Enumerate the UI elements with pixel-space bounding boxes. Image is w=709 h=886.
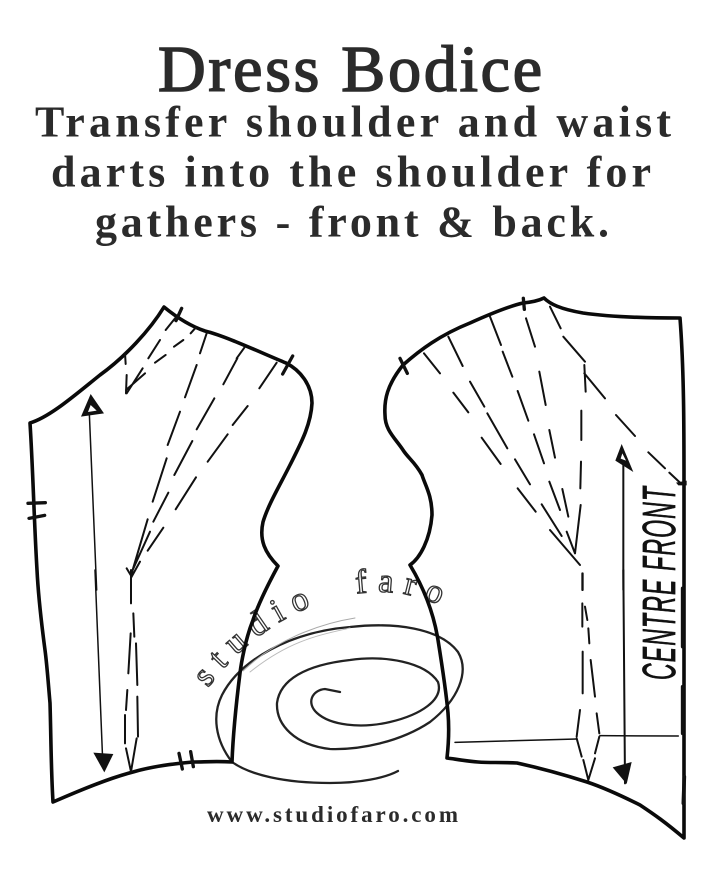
subtitle <box>35 98 671 246</box>
subtitle: Transfer shoulder and waist <box>35 98 671 146</box>
logo: spiral watermark <box>216 618 463 783</box>
subtitle: darts into the shoulder for <box>51 148 651 196</box>
website url: www.studiofaro.com <box>207 802 458 827</box>
subtitle: gathers - front & back. <box>95 198 609 246</box>
front outline <box>385 298 684 838</box>
back darts and arrow, lower <box>93 570 193 772</box>
logo: studio faro wordmark: studio faro <box>197 568 442 688</box>
title: Dress Bodice <box>158 33 542 106</box>
back darts and arrows, upper <box>28 308 293 590</box>
front darts, waist line and arrow, lower <box>455 570 684 803</box>
right bodice: front pattern piece <box>385 298 687 838</box>
label: centre front: CENTRE FRONT <box>633 485 685 680</box>
back outline <box>30 307 312 802</box>
front darts and arrow, upper <box>400 298 687 590</box>
left bodice: back pattern piece <box>28 307 312 802</box>
